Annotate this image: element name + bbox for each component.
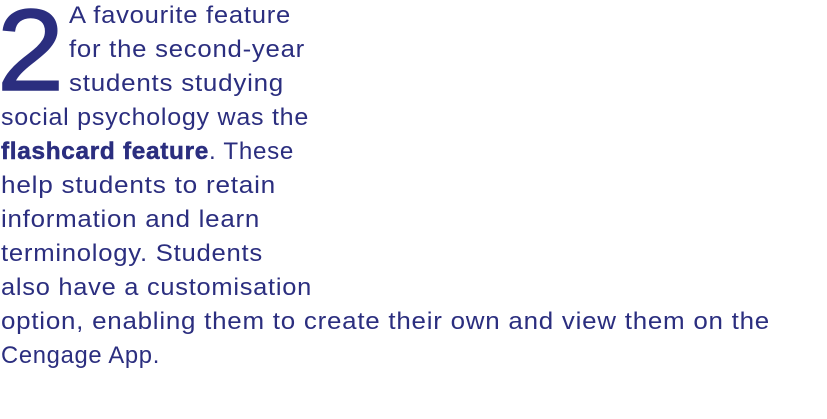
body text block: terminology. Students xyxy=(1,240,263,267)
body text block: help students to retain xyxy=(1,172,276,199)
body text block: students studying xyxy=(69,70,284,97)
body text block: . These xyxy=(209,138,294,165)
body text block: option, enabling them to create their own and view them on the xyxy=(1,308,770,335)
body text block: information and learn xyxy=(1,206,260,233)
body text block: social psychology was the xyxy=(1,104,309,131)
body text block: Cengage App. xyxy=(1,342,160,369)
body text block: also have a customisation xyxy=(1,274,312,301)
body text block: flashcard feature xyxy=(1,138,209,165)
body text block: A favourite feature xyxy=(69,2,291,29)
body text block: for the second-year xyxy=(69,36,305,63)
